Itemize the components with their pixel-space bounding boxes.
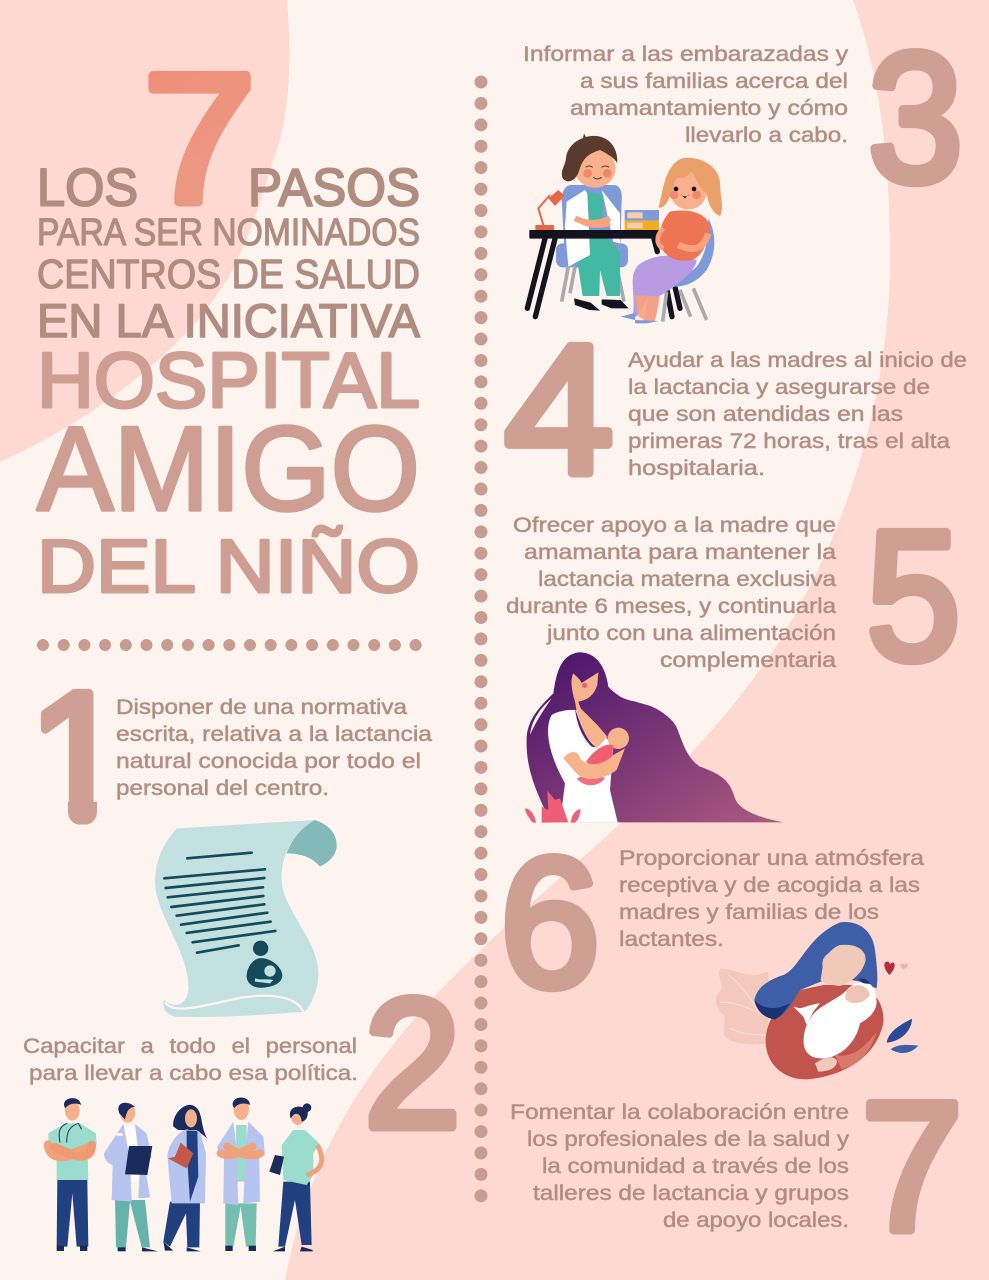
doctor (562, 133, 629, 311)
number 1: 1 (28, 653, 128, 859)
step 3 (523, 14, 963, 323)
number 4: 4 (504, 306, 614, 512)
patient's chair (663, 218, 714, 322)
step 5 text: junto con una alimentación (546, 622, 836, 645)
title: AMIGO (37, 402, 420, 536)
step 4 text: la lactancia y asegurarse de (628, 376, 930, 399)
step 7 text: la comunidad a través de los (542, 1155, 849, 1178)
title: DEL NIÑO (37, 524, 420, 608)
title (37, 35, 421, 608)
step 2 text: para llevar a cabo esa política. (29, 1062, 358, 1085)
step 2 text (23, 1035, 358, 1085)
icon: medical team (48, 1097, 322, 1251)
step 4 text: primeras 72 horas, tras el alta (628, 430, 950, 453)
person 5 (269, 1103, 322, 1251)
person 4 (217, 1097, 265, 1251)
illustration: mother holding baby (716, 922, 918, 1079)
person 3 (163, 1105, 207, 1251)
step 1 text: natural conocida por todo el (116, 750, 421, 773)
step 2 (23, 960, 461, 1251)
step 6 text (619, 847, 924, 951)
number 5: 5 (866, 492, 960, 698)
step 4 text: Ayudar a las madres al inicio de (628, 349, 967, 372)
dotted divider vertical (474, 82, 488, 1196)
step 3 text: amamantamiento y cómo (570, 97, 848, 120)
step 1 text: Disponer de una normativa (116, 696, 407, 719)
step 4 text: que son atendidas en las (628, 403, 903, 426)
title: HOSPITAL (37, 336, 420, 424)
step 7 text (510, 1101, 850, 1232)
step 2 text: Capacitar a todo el personal (23, 1035, 357, 1058)
step 5 (506, 492, 960, 823)
step 3 text: Informar a las embarazadas y (523, 43, 849, 66)
step 7 text: de apoyo locales. (663, 1209, 849, 1232)
icon: document scroll (155, 820, 337, 1017)
desk lamp (535, 190, 565, 230)
step 3 text (523, 43, 849, 147)
step 7 text: Fomentar la colaboración entre (510, 1101, 849, 1124)
icon: leaves (887, 1019, 918, 1053)
step 4 (504, 306, 967, 512)
step 3 text: a sus familias acerca del (580, 70, 848, 93)
number 2: 2 (364, 960, 461, 1166)
step 6 (500, 819, 924, 1079)
step 5 text: complementaria (660, 649, 836, 672)
binders (625, 210, 659, 230)
person 2 (104, 1103, 158, 1251)
dotted divider horizontal (43, 639, 416, 651)
step 7 text: talleres de lactancia y grupos (533, 1182, 849, 1205)
number 7: 7 (861, 1063, 963, 1269)
step 1 text (116, 696, 432, 800)
desk (527, 230, 680, 317)
step 1 text: personal del centro. (116, 777, 329, 800)
step 5 text (506, 514, 836, 672)
step 1 (40, 688, 432, 1018)
title: PARA SER NOMINADOS (37, 212, 420, 254)
title: LOS (37, 158, 138, 218)
step 6 text: madres y familias de los (619, 901, 879, 924)
step 6 text: Proporcionar una atmósfera (619, 847, 924, 870)
step 7 text: los profesionales de la salud y (527, 1128, 850, 1151)
step 5 text: durante 6 meses, y continuarla (506, 595, 836, 618)
step 4 text (628, 349, 967, 480)
step 1 text: escrita, relativa a la lactancia (116, 723, 432, 746)
icon: hearts (884, 962, 908, 975)
patient (621, 158, 722, 323)
step 5 text: amamanta para mantener la (524, 541, 836, 564)
step 3 text: llevarlo a cabo. (685, 124, 848, 147)
number 6: 6 (500, 819, 600, 1025)
number 3: 3 (868, 14, 963, 220)
step 6 text: receptiva y de acogida a las (619, 874, 920, 897)
doctor's chair (556, 185, 628, 267)
step 5 text: Ofrecer apoyo a la madre que (513, 514, 836, 537)
illustration: breastfeeding mother (525, 652, 783, 823)
step 6 text: lactantes. (619, 928, 724, 951)
title: PASOS (248, 158, 420, 218)
title: EN LA INICIATIVA (37, 294, 421, 347)
person 1 (48, 1098, 97, 1251)
title number 7: 7 (143, 35, 256, 241)
title: CENTROS DE SALUD (37, 251, 420, 297)
step 7 (510, 1063, 963, 1269)
illustration: doctor and pregnant patient (527, 133, 722, 323)
step 5 text: lactancia materna exclusiva (538, 568, 836, 591)
step 4 text: hospitalaria. (628, 457, 765, 480)
